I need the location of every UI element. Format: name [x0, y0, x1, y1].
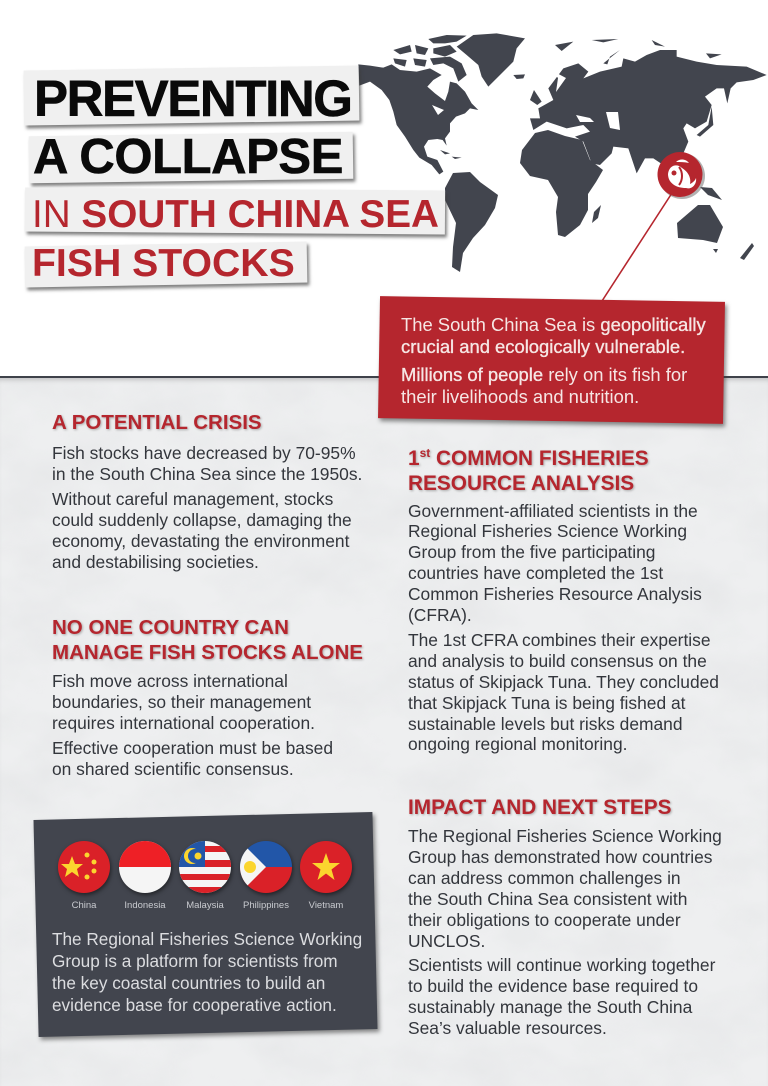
icon: red fish marker [658, 152, 705, 199]
flag: Malaysia [178, 841, 234, 896]
text: impact: sustainably manage the South China [408, 997, 692, 1017]
title [23, 66, 450, 293]
callout panel: South China Sea [378, 296, 725, 424]
text: working group description [52, 929, 362, 1015]
label: Vietnam: Vietnam [309, 900, 343, 911]
callout text [401, 314, 706, 407]
text: impact: to build the evidence base required to [408, 976, 698, 996]
text: potential crisis: economy, devastating the environment [52, 530, 349, 550]
text: CFRA: status of Skipjack Tuna. They concluded [408, 672, 719, 692]
heading: 1st CFRA: 1st COMMON FISHERIES [408, 446, 649, 470]
flag: Indonesia [118, 841, 174, 896]
text: CFRA: that Skipjack Tuna is being fished at [408, 693, 685, 713]
callout text: The South China Sea is geopolitically [401, 314, 706, 335]
text: CFRA: ongoing regional monitoring. [408, 734, 627, 754]
Australia [677, 205, 723, 253]
heading: no one country: MANAGE FISH STOCKS ALONE [52, 641, 363, 664]
text: no one country [52, 670, 333, 778]
text: CFRA: and analysis to build consensus on the [408, 651, 707, 671]
heading: 1st CFRA [408, 446, 650, 495]
text: CFRA: Government-affiliated scientists in the [408, 500, 698, 520]
label: China: China [72, 900, 96, 911]
text: impact: their obligations to cooperate under [408, 910, 681, 930]
label: Philippines: Philippines [243, 900, 289, 911]
callout line [602, 194, 672, 300]
text: impact: can address common challenges in [408, 868, 681, 888]
inland seas and lakes [432, 70, 620, 130]
text: working group description: Group is a platform for scientists from [52, 951, 338, 971]
text: impact: the South China Sea consistent with [408, 889, 687, 909]
text: potential crisis [52, 442, 362, 572]
text: CFRA: Common Fisheries Resource Analysis [408, 584, 702, 604]
text: potential crisis: in the South China Sea since the 1950s. Without careful management, stocks [52, 464, 362, 508]
panel: working group [33, 812, 378, 1037]
North America and Greenland [358, 33, 542, 174]
New Zealand [740, 243, 754, 260]
title line: In South China Sea: IN SOUTH CHINA SEA [32, 193, 439, 236]
text: CFRA: Group from the five participating [408, 542, 655, 562]
text: CFRA: countries have completed the 1st [408, 563, 663, 583]
text: potential crisis: could suddenly collapse, damaging the [52, 510, 352, 530]
flag: Philippines [240, 841, 294, 896]
text: CFRA [408, 500, 719, 754]
text: working group description: The Regional Fisheries Science Working [52, 929, 362, 949]
South America [445, 172, 498, 272]
text: CFRA: sustainable levels but risks demand [408, 714, 683, 734]
world map [358, 33, 766, 272]
title line: A Collapse: A COLLAPSE [33, 130, 343, 184]
text: impact: UNCLOS. Scientists will continue working together [408, 931, 715, 975]
title line: Fish Stocks: FISH STOCKS [32, 242, 295, 284]
paper background panel [0, 376, 768, 1086]
text: working group description: evidence base for cooperative action. [52, 995, 337, 1015]
heading: no one country: NO ONE COUNTRY CAN [52, 616, 289, 639]
text: working group description: the key coastal countries to build an [52, 973, 325, 993]
Madagascar [592, 205, 601, 223]
text: CFRA: (CFRA). The 1st CFRA combines their expertise [408, 605, 711, 650]
text: no one country: Fish move across international [52, 670, 288, 690]
text: no one country: boundaries, so their management [52, 692, 311, 712]
Eurasia [530, 39, 767, 173]
text: CFRA: Regional Fisheries Science Working [408, 521, 687, 541]
heading: no one country [52, 616, 364, 664]
text: no one country: on shared scientific consensus. [52, 758, 294, 778]
text: impact: Group has demonstrated how countries [408, 847, 713, 867]
flag: China [58, 841, 112, 896]
text: impact: Sea’s valuable resources. [408, 1018, 607, 1038]
Africa [520, 130, 603, 237]
New Guinea [700, 187, 722, 200]
label: Indonesia: Indonesia [124, 900, 166, 911]
callout text: crucial and ecologically vulnerable. Millions of people rely on its fish for [401, 336, 687, 385]
heading: 1st CFRA: RESOURCE ANALYSIS [408, 472, 634, 495]
callout text: their livelihoods and nutrition. [401, 386, 639, 407]
text: impact: The Regional Fisheries Science Working [408, 826, 722, 846]
label: Malaysia: Malaysia [186, 900, 224, 911]
text: potential crisis: Fish stocks have decreased by 70-95% [52, 442, 356, 462]
flag: Vietnam [300, 841, 354, 896]
heading: a potential crisis: A POTENTIAL CRISIS [52, 411, 262, 434]
text: no one country: requires international cooperation. Effective cooperation must be based [52, 712, 333, 758]
text: impact [408, 826, 722, 1038]
text: potential crisis: and destabilising societies. [52, 552, 259, 572]
heading: impact and next steps: IMPACT AND NEXT STEPS [408, 796, 671, 819]
title line: Preventing: PREVENTING [34, 70, 352, 127]
